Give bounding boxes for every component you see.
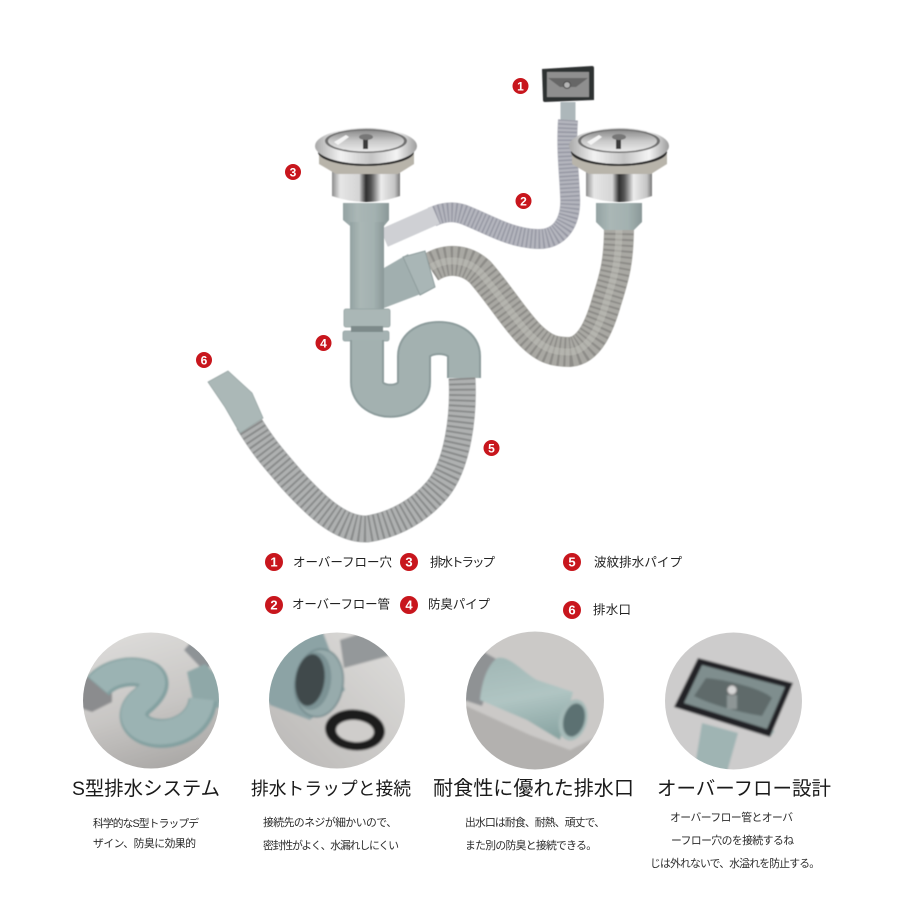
description: 出水口は耐食、耐熱、頑丈で、 <box>465 816 605 829</box>
description: また別の防臭と接続できる。 <box>465 838 597 852</box>
description <box>263 815 399 852</box>
number badge 2: 2 <box>520 194 527 208</box>
number badge 1: 1 <box>517 80 524 94</box>
description: じは外れないで、水溢れを防止する。 <box>650 856 820 870</box>
legend item 5: 5 <box>568 554 576 570</box>
corrugated drain hose <box>248 378 462 529</box>
legend item 6: 排水口 <box>593 603 631 617</box>
photo: S trap <box>80 630 222 772</box>
feature panel: overflow design <box>650 630 831 870</box>
feature panel: corrosion resistant outlet <box>433 630 634 852</box>
heading: オーバーフロー設計 <box>657 778 831 800</box>
S-shaped trap <box>367 338 464 401</box>
description <box>650 810 820 870</box>
number badge 3 <box>285 164 301 180</box>
number badge 1 <box>512 78 528 94</box>
tee pipe branch <box>372 251 435 308</box>
number badge 4: 4 <box>320 336 327 350</box>
legend item 3 <box>400 553 495 571</box>
legend item 6 <box>563 601 631 619</box>
legend item 2 <box>265 596 390 614</box>
number badge 5 <box>484 440 500 456</box>
legend item 4: 4 <box>405 598 413 612</box>
photo: drain outlet tube <box>462 630 606 775</box>
overflow hole plate <box>542 66 594 102</box>
feature panel: S-type drain <box>72 630 222 850</box>
legend item 1 <box>265 553 392 571</box>
photo: threaded connector and gasket <box>269 632 405 768</box>
parts legend <box>265 553 682 619</box>
description: 接続先のネジが細かいので、 <box>263 815 397 829</box>
heading: S型排水システム <box>72 778 220 800</box>
description: 密封性がよく、水漏れしにくい <box>263 838 399 852</box>
legend item 1: 1 <box>270 554 278 570</box>
number badge 4 <box>316 335 332 351</box>
description: ーフロー穴のを接続するね <box>671 833 794 847</box>
number badge 6: 6 <box>201 354 208 368</box>
legend item 1: オーバーフロー穴 <box>293 556 392 570</box>
description: オーバーフロー管とオーバ <box>670 810 793 824</box>
legend item 5: 波紋排水パイプ <box>594 554 682 570</box>
legend item 4: 防臭パイプ <box>428 596 490 612</box>
overflow pipe <box>384 102 570 239</box>
infographic canvas <box>72 65 830 868</box>
description: ザイン、防臭に効果的 <box>93 836 196 850</box>
number badge 2 <box>516 193 532 209</box>
legend item 2: オーバーフロー管 <box>292 596 390 612</box>
right strainer <box>569 128 669 230</box>
legend item 5 <box>563 553 682 571</box>
photo: overflow plate <box>663 630 805 772</box>
legend item 3: 排水トラップ <box>430 556 495 570</box>
legend item 2: 2 <box>270 598 278 612</box>
description: 科学的なS型トラップデ <box>93 816 199 830</box>
vertical trap pipe with nut <box>343 222 390 341</box>
product diagram: double sink drain assembly <box>208 66 669 529</box>
feature panel: trap connection <box>251 628 411 852</box>
legend item 6: 6 <box>568 602 576 618</box>
legend item 3: 3 <box>405 554 413 570</box>
heading: 排水トラップと接続 <box>251 779 411 799</box>
number badge 6 <box>196 352 212 368</box>
description <box>465 816 605 852</box>
heading: 耐食性に優れた排水口 <box>433 777 634 800</box>
description <box>93 816 199 850</box>
number badge 5: 5 <box>488 442 495 456</box>
number badge 3: 3 <box>290 166 297 180</box>
drain outlet <box>208 371 263 433</box>
left strainer <box>315 128 417 226</box>
corrugated waste hose from right strainer <box>430 225 619 352</box>
legend item 4 <box>400 596 490 614</box>
